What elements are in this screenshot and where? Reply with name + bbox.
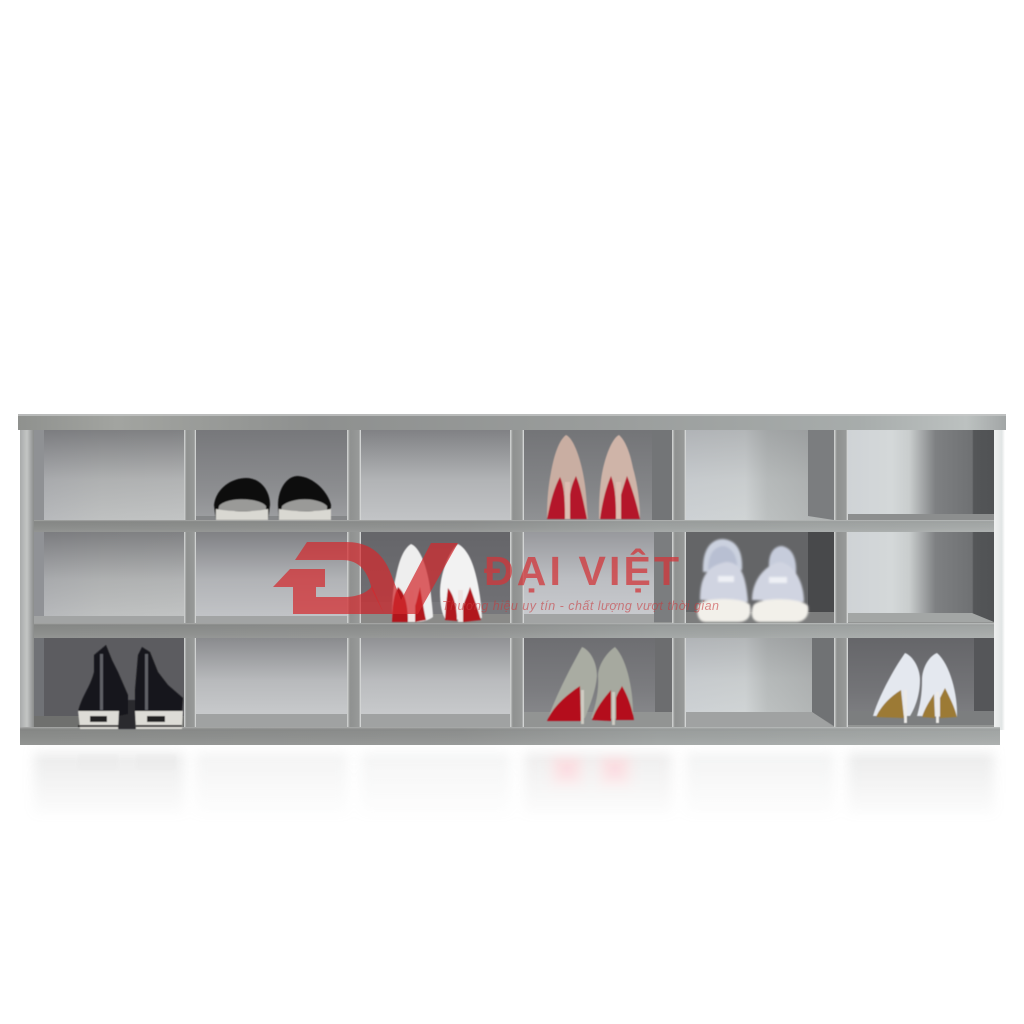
shoes: white gold-sole heels	[873, 653, 957, 723]
shoes: white red-sole heels	[392, 544, 482, 622]
compartment r1c6	[848, 430, 994, 520]
shoes: slides	[214, 476, 331, 520]
compartment r1c1	[34, 430, 184, 520]
compartment r3c6	[848, 636, 994, 725]
compartment r2c5	[686, 532, 834, 623]
logo name: ĐẠI VIỆT	[484, 548, 679, 594]
row 1 compartments	[34, 430, 994, 520]
logo tagline: Thương hiệu uy tín - chất lượng vượt thời gian	[442, 599, 719, 613]
compartment r3c5	[686, 637, 834, 727]
compartment r2c2	[196, 532, 347, 625]
compartment r2c4	[524, 532, 672, 624]
watermark logo: Đại Việt	[273, 542, 719, 614]
compartment r2c3	[361, 532, 510, 624]
compartment r3c3	[361, 638, 510, 729]
shoes: grey red-sole heels	[547, 647, 634, 725]
shoe cabinet	[18, 414, 1006, 745]
shoes: white sneakers	[697, 539, 808, 622]
compartment r3c1	[34, 638, 184, 729]
row 2 compartments	[34, 532, 994, 625]
compartment r3c4	[524, 637, 672, 728]
compartment r1c2	[196, 430, 347, 520]
logo mark DV	[273, 542, 458, 614]
cabinet frame	[20, 428, 1005, 745]
vertical dividers	[184, 430, 848, 730]
row 3 compartments	[34, 636, 994, 729]
compartment r3c2	[196, 638, 347, 729]
compartment r1c4	[524, 430, 672, 520]
shoes: nude red-sole heels	[547, 435, 640, 519]
compartment r2c6	[848, 532, 994, 622]
shelves, top and base	[18, 414, 1006, 745]
compartment r1c5	[686, 430, 834, 520]
compartment r1c3	[361, 430, 510, 520]
compartment r2c1	[34, 532, 184, 625]
shoes: black high-top sneakers	[78, 645, 183, 729]
floor reflection	[34, 752, 994, 796]
